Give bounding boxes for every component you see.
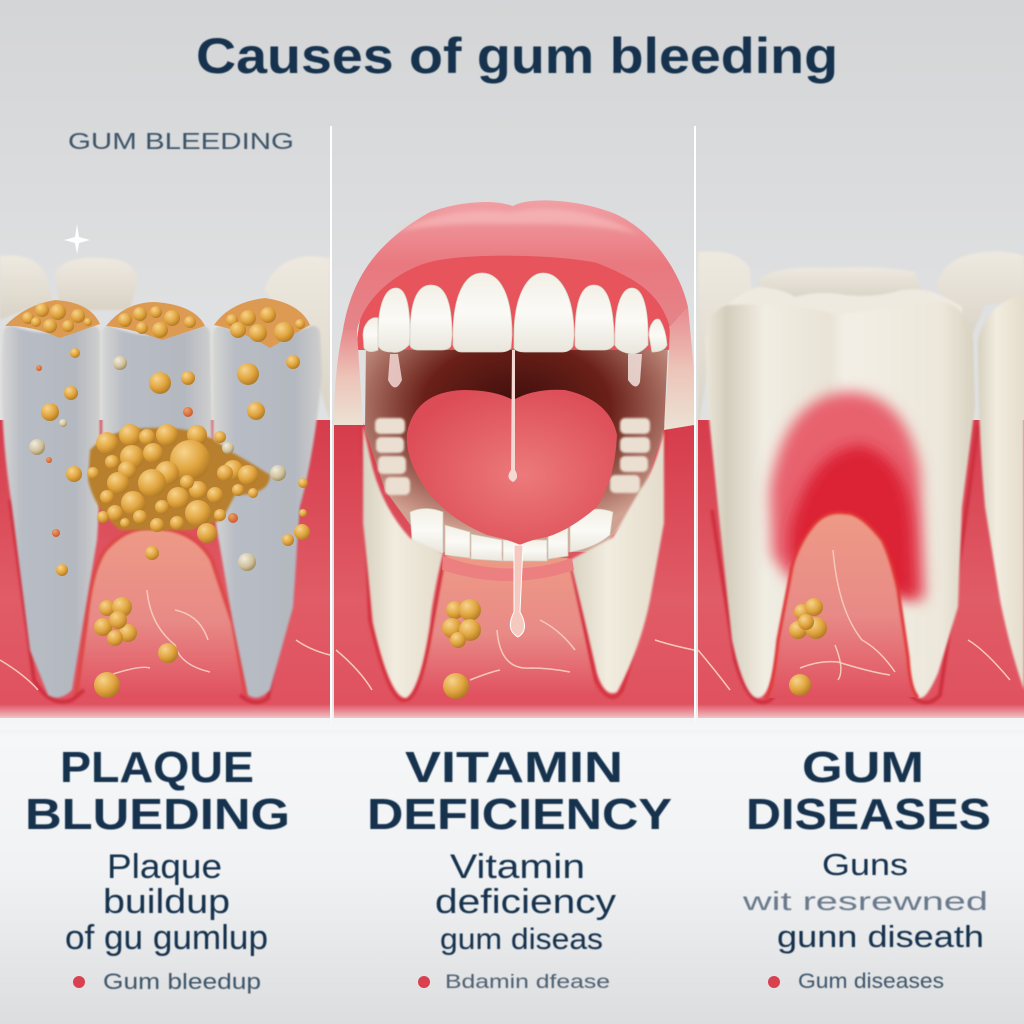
description: plaque: of gu gumlup xyxy=(65,919,268,957)
description: gum diseases: gunn diseath xyxy=(777,919,984,954)
bullet: vitamin xyxy=(418,972,610,993)
lip sides xyxy=(334,330,363,425)
description: plaque: Plaque xyxy=(107,848,222,886)
right tooth xyxy=(978,293,1024,690)
description: vitamin: gum diseas xyxy=(440,923,603,956)
divider xyxy=(694,126,696,726)
title: Causes of gum bleeding xyxy=(196,28,838,84)
deposits xyxy=(789,598,827,696)
description: plaque: buildup xyxy=(103,883,230,921)
gum arch xyxy=(765,513,918,698)
heading: vitamin deficiency: DEFICIENCY xyxy=(367,790,672,839)
panel: plaque bleeding xyxy=(0,128,330,994)
gum arch xyxy=(76,528,246,697)
bullet: gum diseases: Gum diseases xyxy=(798,970,944,993)
illustration: plaque teeth xyxy=(0,255,330,718)
illustration: open mouth xyxy=(334,200,694,718)
bullet: plaque: Gum bleedup xyxy=(103,969,261,994)
panel: vitamin deficiency xyxy=(334,200,694,993)
tooth middle xyxy=(102,326,212,440)
upper gum xyxy=(357,248,670,350)
icon: sparkle xyxy=(64,224,90,254)
lower teeth xyxy=(410,508,613,561)
illustration: inflamed tooth xyxy=(698,251,1024,718)
gum under mouth xyxy=(414,556,597,697)
back teeth xyxy=(375,418,650,495)
molar tooth xyxy=(705,302,975,698)
side teeth roots xyxy=(363,425,443,698)
label: gum bleeding: GUM BLEEDING xyxy=(68,128,294,154)
plaque deposits xyxy=(5,298,310,698)
heading: vitamin deficiency: VITAMIN xyxy=(405,743,623,792)
lips xyxy=(343,200,688,330)
heading: plaque bleeding: PLAQUE xyxy=(60,743,254,792)
panel: gum diseases xyxy=(698,251,1024,993)
description: vitamin: deficiency xyxy=(435,883,616,921)
lower lip strip xyxy=(442,556,574,581)
tooth right xyxy=(213,326,322,698)
bullet: vitamin: Bdamin dfease xyxy=(445,972,610,993)
heading: gum diseases: DISEASES xyxy=(746,790,991,839)
heading: plaque bleeding: BLUEDING xyxy=(25,790,290,839)
divider xyxy=(330,126,332,726)
description: gum diseases: wit resrewned xyxy=(741,886,988,916)
mouth interior xyxy=(365,345,668,552)
inflammation xyxy=(770,392,925,600)
gum fade into caption area xyxy=(0,704,1024,730)
upper teeth xyxy=(363,273,667,354)
saliva drops xyxy=(388,350,642,637)
back rim of molar xyxy=(728,287,962,340)
deposits xyxy=(442,599,481,699)
tongue xyxy=(407,390,617,545)
tooth left xyxy=(2,326,100,698)
description: gum diseases: Guns xyxy=(822,847,908,882)
heading: gum diseases: GUM xyxy=(802,743,924,792)
description: vitamin: Vitamin xyxy=(450,848,585,886)
gum veins xyxy=(800,550,895,680)
